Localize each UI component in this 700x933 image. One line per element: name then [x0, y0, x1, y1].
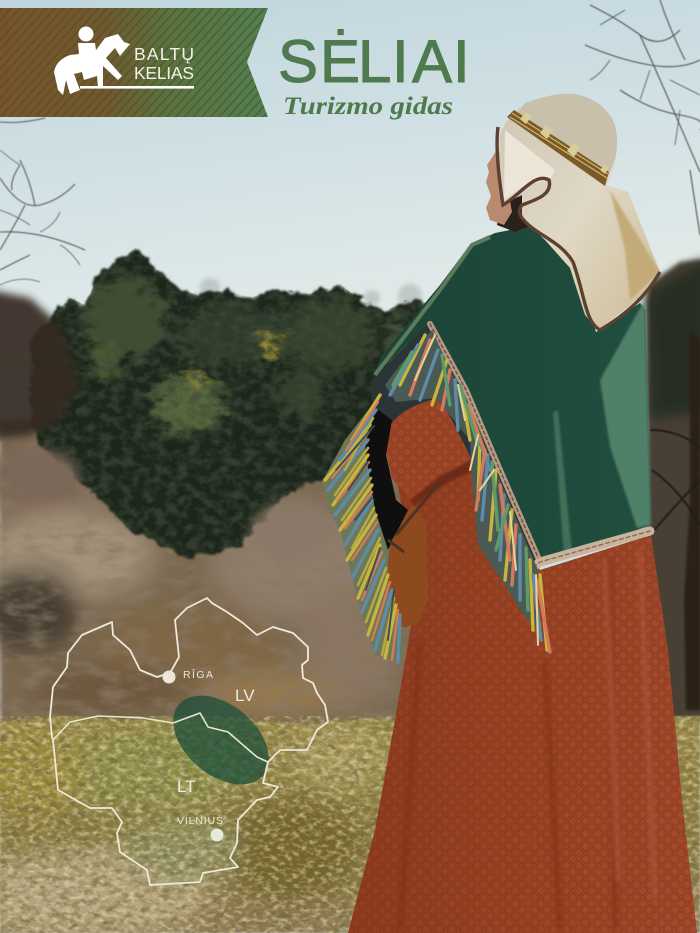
sky background [0, 0, 700, 360]
country outline [50, 598, 328, 885]
hood [499, 94, 660, 330]
cape light fold [553, 410, 572, 556]
shrub overlap at forest foot [2, 451, 328, 558]
icon: horse and rider logo [54, 26, 130, 95]
right background tree mass [645, 258, 700, 720]
ribbon banner: KELIAS [134, 63, 194, 83]
Selonia highlighted region [156, 678, 286, 802]
logo wordmark: BALTŲ [134, 44, 194, 64]
fringe: right side [385, 330, 550, 652]
distant hazy trees [200, 278, 422, 308]
dark backing behind fringe and sleeve [372, 322, 540, 565]
Riga label: RĪGA [183, 669, 213, 681]
bag [386, 482, 440, 628]
dark cape lining [365, 405, 408, 550]
LT label: LT [177, 777, 196, 796]
cape lighter front panel [600, 303, 651, 528]
hood shadow and light [610, 190, 660, 300]
Riga marker [162, 670, 176, 684]
Vilnius marker [210, 828, 224, 842]
grass meadow [0, 716, 700, 933]
subtitle: Turizmo gidas [283, 93, 453, 120]
dress [348, 450, 697, 933]
hood cap shading [515, 94, 617, 178]
bare tree branches, left [0, 118, 85, 285]
title: SĖLIAI [278, 28, 470, 95]
dark conifer forest [29, 248, 428, 560]
Vilnius label: VILNIUS [177, 815, 223, 827]
cape shoulder trim [375, 237, 490, 375]
woven headband [507, 110, 609, 186]
map: Latvia and Lithuania outline [50, 598, 328, 885]
sleeve [386, 398, 472, 500]
green cape [372, 226, 651, 565]
logo underline [80, 86, 194, 89]
LV label: LV [235, 686, 255, 705]
face [486, 150, 512, 225]
neck and hair [497, 195, 530, 232]
sleeve underside shadow [410, 460, 474, 506]
bare tree branches, right [585, 0, 700, 235]
background shrubs and field [0, 420, 430, 730]
dark tree mass at left [0, 290, 80, 440]
dress folds [400, 550, 655, 930]
cape patterned trim [430, 324, 650, 572]
fringe: left side [322, 392, 402, 663]
hood trim [497, 127, 660, 330]
Latvia-Lithuania border [53, 713, 268, 762]
ribbon banner [0, 8, 268, 117]
woman in traditional Selonian dress [322, 94, 697, 933]
